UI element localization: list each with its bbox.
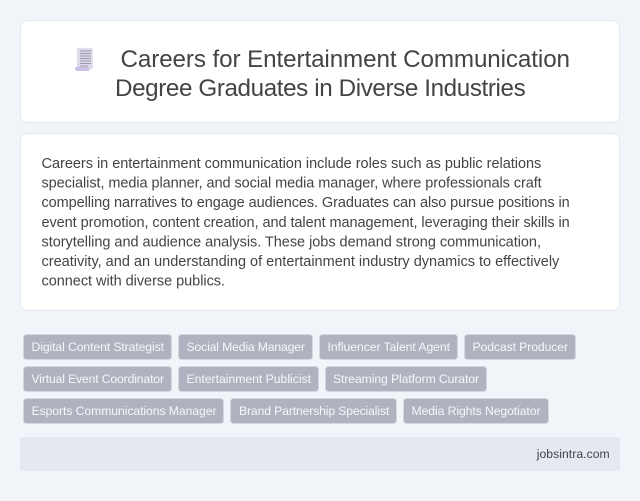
tag: Entertainment Publicist [178, 366, 318, 392]
tag: Brand Partnership Specialist: Brand Partnership Specialist [239, 404, 390, 418]
tags: career list [24, 334, 576, 424]
tag: Esports Communications Manager [24, 398, 224, 424]
tag: Digital Content Strategist [24, 334, 172, 360]
tag: Streaming Platform Curator: Streaming Platform Curator [333, 372, 479, 386]
tag: Social Media Manager: Social Media Manager [186, 340, 305, 354]
heading: Careers for Entertainment Communication [120, 46, 570, 73]
panel: description card [20, 134, 620, 310]
text block: description: storytelling and audience analysis. These jobs demand strong communication, [42, 234, 541, 250]
tag: Esports Communications Manager: Esports Communications Manager [32, 404, 216, 418]
footer source text: jobsintra.com [536, 447, 610, 461]
heading: Degree Graduates in Diverse Industries [115, 75, 526, 102]
text block: description: event promotion, content creation, and talent management, leveraging their skills in [42, 215, 570, 231]
text block: description: creativity, and an understanding of entertainment industry dynamics to effectively [42, 254, 560, 270]
tag: Streaming Platform Curator [326, 366, 486, 392]
tag: Media Rights Negotiator [404, 398, 548, 424]
tag: Digital Content Strategist: Digital Content Strategist [32, 340, 165, 354]
panel: title card [20, 20, 620, 122]
tag: Entertainment Publicist: Entertainment Publicist [186, 372, 312, 386]
tag: Virtual Event Coordinator [24, 366, 172, 392]
text block: description [42, 156, 570, 290]
footer [20, 437, 620, 471]
tag: Podcast Producer: Podcast Producer [472, 340, 568, 354]
heading [115, 46, 570, 102]
tag: Media Rights Negotiator: Media Rights Negotiator [412, 404, 540, 418]
tag: Social Media Manager [178, 334, 312, 360]
tag: Influencer Talent Agent [320, 334, 458, 360]
tag: Podcast Producer [464, 334, 576, 360]
text block: description: compelling narratives to engage audiences. Graduates can also pursue positions in [42, 195, 570, 211]
icon: document scroll [75, 48, 93, 71]
tag: Virtual Event Coordinator: Virtual Event Coordinator [32, 372, 164, 386]
tag: Brand Partnership Specialist [230, 398, 396, 424]
tag: Influencer Talent Agent: Influencer Talent Agent [328, 340, 451, 354]
text block: description: specialist, media planner, and social media manager, where professionals craft [42, 176, 542, 192]
text block: description: Careers in entertainment communication include roles such as public relations [42, 156, 541, 172]
text block: description: connect with diverse publics. [42, 274, 225, 290]
